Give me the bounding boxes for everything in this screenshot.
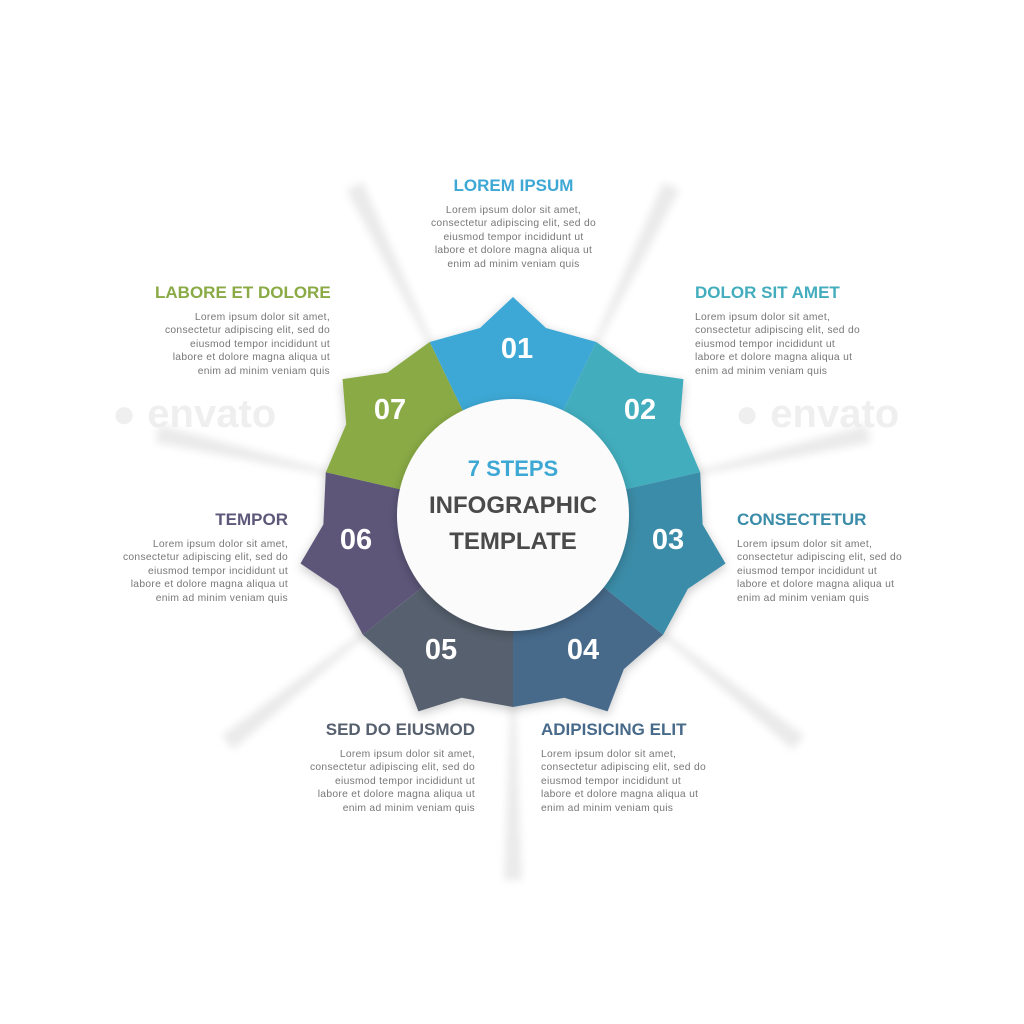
text 06: eiusmod tempor incididunt ut: [148, 566, 288, 577]
text 04: consectetur adipiscing elit, sed do: [541, 762, 706, 773]
text 02: consectetur adipiscing elit, sed do: [695, 325, 860, 336]
text 04: Lorem ipsum dolor sit amet,: [541, 749, 676, 760]
text 04: ADIPISICING ELIT: [541, 720, 686, 739]
text 07: Lorem ipsum dolor sit amet,: [195, 312, 330, 323]
center title: [429, 456, 597, 555]
text 05: eiusmod tempor incididunt ut: [335, 776, 475, 787]
center title: TEMPLATE: [449, 528, 577, 555]
center circle: [397, 399, 629, 631]
text 07: enim ad minim veniam quis: [198, 366, 330, 377]
text 06: labore et dolore magna aliqua ut: [131, 579, 288, 590]
watermark left: ● envato: [112, 392, 276, 436]
text 02: eiusmod tempor incididunt ut: [695, 339, 835, 350]
text 02: enim ad minim veniam quis: [695, 366, 827, 377]
star segments: [282, 297, 744, 748]
watermark right: ● envato: [735, 392, 899, 436]
text 07: eiusmod tempor incididunt ut: [190, 339, 330, 350]
text 01: [398, 176, 628, 494]
center title: 7 STEPS: [468, 456, 558, 481]
text 06: enim ad minim veniam quis: [156, 593, 288, 604]
text 02: [695, 283, 860, 377]
text 02: DOLOR SIT AMET: [695, 283, 840, 302]
text 03: labore et dolore magna aliqua ut: [737, 579, 894, 590]
shadow rays: [155, 182, 871, 880]
text 01: enim ad minim veniam quis: [447, 259, 580, 270]
step numbers: 06: [340, 524, 372, 556]
text 03: consectetur adipiscing elit, sed do: [737, 552, 902, 563]
text 03: enim ad minim veniam quis: [737, 593, 869, 604]
text 02: Lorem ipsum dolor sit amet,: [695, 312, 830, 323]
text 05: consectetur adipiscing elit, sed do: [310, 762, 475, 773]
step numbers: 02: [624, 394, 656, 426]
text 06: consectetur adipiscing elit, sed do: [123, 552, 288, 563]
text 04: [541, 720, 706, 814]
text 03: CONSECTETUR: [737, 510, 866, 529]
text 01: consectetur adipiscing elit, sed do: [431, 218, 596, 229]
text 05: [310, 720, 475, 814]
text 07: [155, 283, 331, 377]
text 03: eiusmod tempor incididunt ut: [737, 566, 877, 577]
text 07: LABORE ET DOLORE: [155, 283, 331, 302]
step numbers: 01: [501, 333, 533, 365]
step numbers: 05: [425, 634, 457, 666]
text 05: SED DO EIUSMOD: [326, 720, 475, 739]
text 03: [737, 510, 902, 604]
text 01: LOREM IPSUM: [454, 176, 573, 195]
text 04: labore et dolore magna aliqua ut: [541, 789, 698, 800]
text 02: labore et dolore magna aliqua ut: [695, 352, 852, 363]
text 05: enim ad minim veniam quis: [343, 803, 475, 814]
text 01: Lorem ipsum dolor sit amet,: [446, 205, 581, 216]
step numbers: 07: [374, 394, 406, 426]
text 04: eiusmod tempor incididunt ut: [541, 776, 681, 787]
text 03: Lorem ipsum dolor sit amet,: [737, 539, 872, 550]
center title: INFOGRAPHIC: [429, 492, 597, 519]
step numbers: [340, 333, 684, 666]
text 06: Lorem ipsum dolor sit amet,: [153, 539, 288, 550]
text 05: labore et dolore magna aliqua ut: [318, 789, 475, 800]
text 07: consectetur adipiscing elit, sed do: [165, 325, 330, 336]
step numbers: 03: [652, 524, 684, 556]
text 06: TEMPOR: [215, 510, 288, 529]
text 04: enim ad minim veniam quis: [541, 803, 673, 814]
text 07: labore et dolore magna aliqua ut: [173, 352, 330, 363]
text 06: [123, 510, 288, 604]
text 05: Lorem ipsum dolor sit amet,: [340, 749, 475, 760]
text 01: eiusmod tempor incididunt ut: [443, 232, 584, 243]
text 01: labore et dolore magna aliqua ut: [435, 245, 592, 256]
step numbers: 04: [567, 634, 599, 666]
